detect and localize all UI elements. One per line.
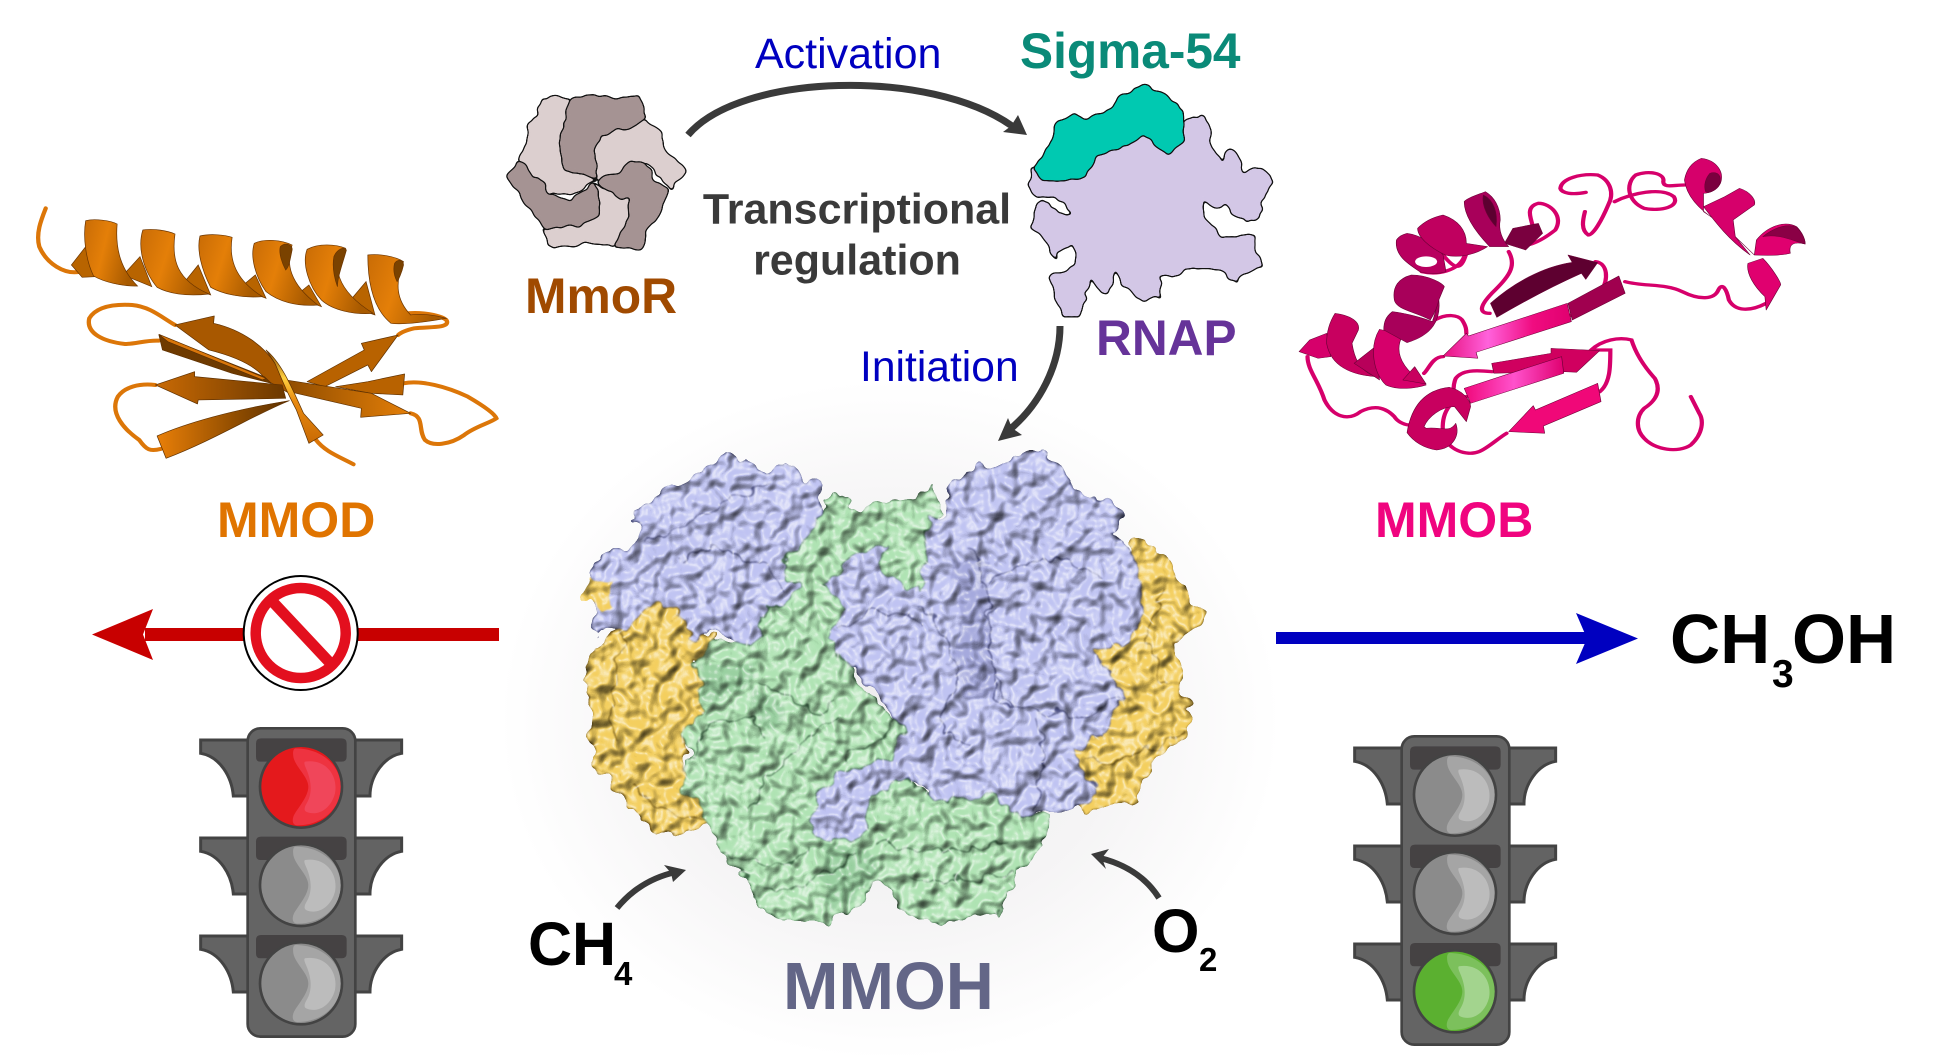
arrow: red inhibition — [92, 609, 499, 660]
helix — [71, 220, 446, 324]
formula: CH3OH: CH — [1670, 600, 1770, 678]
formula: CH3OH: OH — [1792, 600, 1896, 678]
formula: CH3OH: 3 — [1772, 653, 1794, 696]
text: Transcriptional regulation: Transcriptional — [703, 186, 1011, 234]
strands — [155, 316, 411, 458]
title: Activation: Activation — [755, 30, 941, 78]
arrow: activation — [688, 85, 1027, 135]
icon: no entry sign — [244, 576, 358, 690]
icon: RNAP with sigma-54 — [1027, 85, 1272, 318]
icon: traffic light red — [201, 728, 402, 1037]
label: MMOH: MMOH — [783, 950, 994, 1024]
strands — [1443, 255, 1625, 433]
formula: CH3OH — [1670, 600, 1896, 696]
text: Transcriptional regulation — [703, 186, 1011, 284]
icon: MmoR hexamer — [505, 93, 686, 250]
helices — [1299, 158, 1805, 450]
formula: O2 — [1152, 897, 1217, 978]
formula: CH4 — [528, 910, 633, 992]
label: MmoR: MmoR — [525, 268, 677, 324]
loops — [1308, 173, 1766, 453]
formula: O2: O — [1152, 897, 1199, 965]
label: Sigma-54: Sigma-54 — [1020, 23, 1241, 79]
arrow: O2 to MMOH — [1091, 849, 1159, 898]
formula: CH4: 4 — [614, 955, 633, 992]
arrow: blue to methanol — [1276, 613, 1638, 664]
arrow: initiation — [998, 326, 1060, 441]
backdrop glow behind MMOH — [500, 380, 1280, 1060]
label: RNAP: RNAP — [1096, 310, 1237, 366]
shaded trench in lavender — [950, 559, 994, 699]
protein: MMOD cartoon — [38, 208, 496, 464]
formula: CH4: CH — [528, 910, 616, 978]
formula: O2: 2 — [1199, 941, 1217, 978]
arrow: CH4 to MMOH — [617, 865, 686, 908]
text: Transcriptional regulation: regulation — [753, 236, 961, 284]
surface creases — [647, 484, 1124, 810]
yellow left subunit — [586, 601, 716, 836]
shaded green patches — [699, 663, 877, 914]
green subunit — [681, 484, 1048, 924]
lavender right lobe — [814, 448, 1141, 842]
protein: MMOB cartoon — [1299, 158, 1805, 453]
yellow left patch — [584, 575, 612, 609]
loops — [38, 208, 496, 464]
protein: MMOH surface — [584, 448, 1206, 924]
label: MMOD: MMOD — [217, 492, 375, 548]
lavender left lobe — [593, 450, 822, 643]
yellow right subunit — [1072, 540, 1206, 814]
icon: traffic light green — [1355, 736, 1556, 1045]
label: MMOB: MMOB — [1375, 492, 1533, 548]
label: Initiation: Initiation — [860, 343, 1019, 391]
